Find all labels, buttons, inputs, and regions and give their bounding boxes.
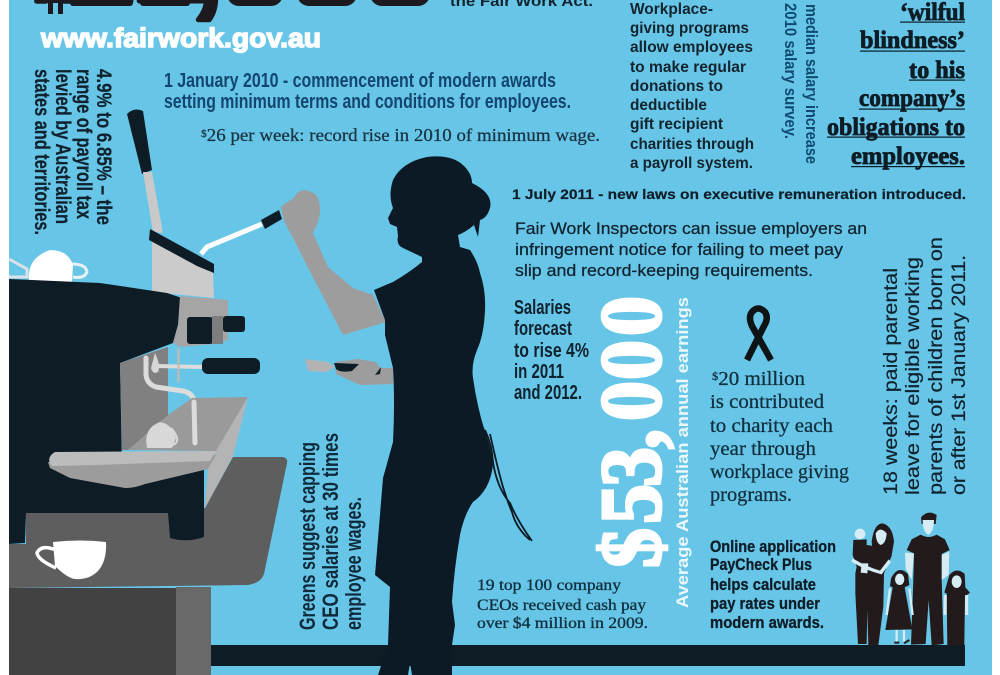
charity contribution note: year through <box>710 438 816 460</box>
modern awards note: 1 January 2010 - commencement of modern awards <box>164 70 556 92</box>
paycheck plus note: PayCheck Plus <box>710 555 812 574</box>
pale steam stripe <box>177 348 180 382</box>
salaries forecast note: in 2011 <box>514 361 564 383</box>
minimum wage note: 26 per week: record rise in 2010 of minimum wage. <box>207 125 600 145</box>
parental leave note: or after 1st January 2011. <box>949 255 970 495</box>
portafilter basket light <box>305 359 335 372</box>
modern awards note <box>164 70 571 113</box>
cup handle <box>72 264 87 277</box>
charity contribution note: 20 million <box>718 368 805 390</box>
illustration: family <box>851 513 970 646</box>
charity contribution note: programs. <box>710 484 792 506</box>
payroll tax note: levied by Australian <box>51 69 74 224</box>
payroll tax note: 4.9% to 6.85% – the <box>92 69 115 225</box>
group ring <box>212 316 223 344</box>
group head block <box>173 296 228 347</box>
average earnings label: Average Australian annual earnings <box>673 297 692 608</box>
CEO pay note: 19 top 100 company <box>477 577 621 594</box>
barista arm <box>281 190 386 335</box>
drip tray side <box>205 397 248 508</box>
portafilter drop <box>151 353 159 373</box>
payroll tax note: range of payroll tax <box>72 69 95 219</box>
parental leave note: 18 weeks: paid parental <box>881 268 902 495</box>
paycheck plus note <box>710 537 836 632</box>
workplace giving note: giving programs <box>630 20 749 37</box>
parental leave note <box>881 237 970 495</box>
tamper rod <box>201 224 262 254</box>
illustration: barista <box>201 156 532 675</box>
workplace giving note: Workplace- <box>630 1 713 18</box>
parental leave note: leave for eligible working <box>903 257 924 495</box>
salaries forecast note: forecast <box>514 318 572 340</box>
steam pipe lower <box>194 402 195 443</box>
workplace giving note: deductible <box>630 97 707 114</box>
salaries forecast note: Salaries <box>514 297 571 319</box>
group knob <box>223 316 245 332</box>
greens salary cap note: Greens suggest capping <box>295 442 320 630</box>
paycheck plus note: pay rates under <box>710 594 820 613</box>
charity contribution note: workplace giving <box>710 461 849 483</box>
wilful blindness quote: company’s <box>859 85 965 112</box>
parental leave note: parents of children born on <box>926 237 947 495</box>
apron strings <box>485 430 532 541</box>
workplace giving note: to make regular <box>630 59 746 76</box>
charity contribution note: is contributed <box>710 391 824 413</box>
paycheck plus note: Online application <box>710 537 836 556</box>
paycheck plus note: helps calculate <box>710 575 816 594</box>
greens salary cap note: employee wages. <box>341 497 366 630</box>
table front light <box>176 587 211 675</box>
payroll tax note: states and territories. <box>30 69 53 235</box>
upside-down cup on tray <box>146 422 176 448</box>
daughter <box>885 570 913 643</box>
workplace giving note: a payroll system. <box>630 155 753 172</box>
workplace giving note: donations to <box>630 78 723 95</box>
steam pipe <box>146 358 195 443</box>
wilful blindness quote: blindness’ <box>860 27 965 54</box>
icon: black ribbon <box>747 308 771 360</box>
illustration: espresso machine <box>9 110 287 675</box>
group cylinder <box>187 317 213 344</box>
median salary note: median salary increase <box>802 4 821 164</box>
second cup rim <box>9 259 27 277</box>
son <box>944 571 970 645</box>
table top <box>9 457 287 588</box>
wilful blindness quote: to his <box>909 57 965 84</box>
greens salary cap note: CEO salaries at 30 times <box>318 433 343 630</box>
lever handle <box>127 110 152 174</box>
charity contribution note <box>710 368 849 506</box>
drip tray lip <box>49 451 216 466</box>
workplace giving note: allow employees <box>630 39 753 56</box>
wilful blindness quote: employees. <box>851 143 965 170</box>
table front dark <box>9 588 176 675</box>
greens salary cap note <box>295 433 366 630</box>
machine upper body <box>152 240 214 298</box>
paycheck plus note: modern awards. <box>710 613 824 632</box>
fair work inspectors note <box>515 219 867 280</box>
small cup on top <box>29 250 73 283</box>
median salary note <box>781 3 821 164</box>
portafilter rod <box>156 366 203 367</box>
payroll tax note <box>30 69 115 235</box>
median salary note: 2010 salary survey. <box>781 3 800 139</box>
salaries forecast note: to rise 4% <box>514 340 589 362</box>
back panel <box>120 347 168 450</box>
website address: www.fairwork.gov.au <box>40 23 321 53</box>
holding hand <box>335 359 393 385</box>
drip tray top <box>128 397 248 451</box>
average earnings figure: $53,000 <box>584 296 680 568</box>
mother and baby <box>851 523 894 646</box>
fair work inspectors note: slip and record-keeping requirements. <box>515 261 813 280</box>
CEO pay note <box>477 577 648 632</box>
white cup on table <box>37 540 106 579</box>
wilful blindness quote <box>827 0 965 170</box>
workplace giving note: gift recipient <box>630 116 724 133</box>
modern awards note: setting minimum terms and conditions for employees. <box>164 91 571 113</box>
minimum wage note: $ <box>201 128 207 140</box>
father <box>905 513 950 645</box>
machine main body <box>9 279 204 544</box>
wilful blindness quote: obligations to <box>827 114 965 141</box>
barista silhouette <box>374 156 493 675</box>
fair work inspectors note: infringement notice for failing to meet pay <box>515 240 844 259</box>
salaries forecast note: and 2012. <box>514 382 582 404</box>
portafilter handle <box>202 358 260 374</box>
machine top stripe <box>149 229 214 273</box>
tray cup handle <box>169 428 177 445</box>
floor bar <box>211 645 965 666</box>
executive remuneration note: 1 July 2011 - new laws on executive remuneration introduced. <box>512 186 966 202</box>
thumb shadow <box>375 367 381 375</box>
lever rod <box>143 172 163 233</box>
workplace giving note: charities through <box>630 136 754 153</box>
drip tray lower <box>48 455 216 488</box>
tamper grip <box>261 210 282 229</box>
portafilter bowl <box>334 363 359 372</box>
salaries forecast note <box>514 297 589 404</box>
workplace giving note <box>630 1 754 172</box>
charity contribution note: to charity each <box>710 415 833 437</box>
charity contribution note: $ <box>712 369 718 383</box>
fair work inspectors note: Fair Work Inspectors can issue employers an <box>515 219 867 238</box>
CEO pay note: over $4 million in 2009. <box>477 615 648 632</box>
CEO pay note: CEOs received cash pay <box>477 597 646 614</box>
